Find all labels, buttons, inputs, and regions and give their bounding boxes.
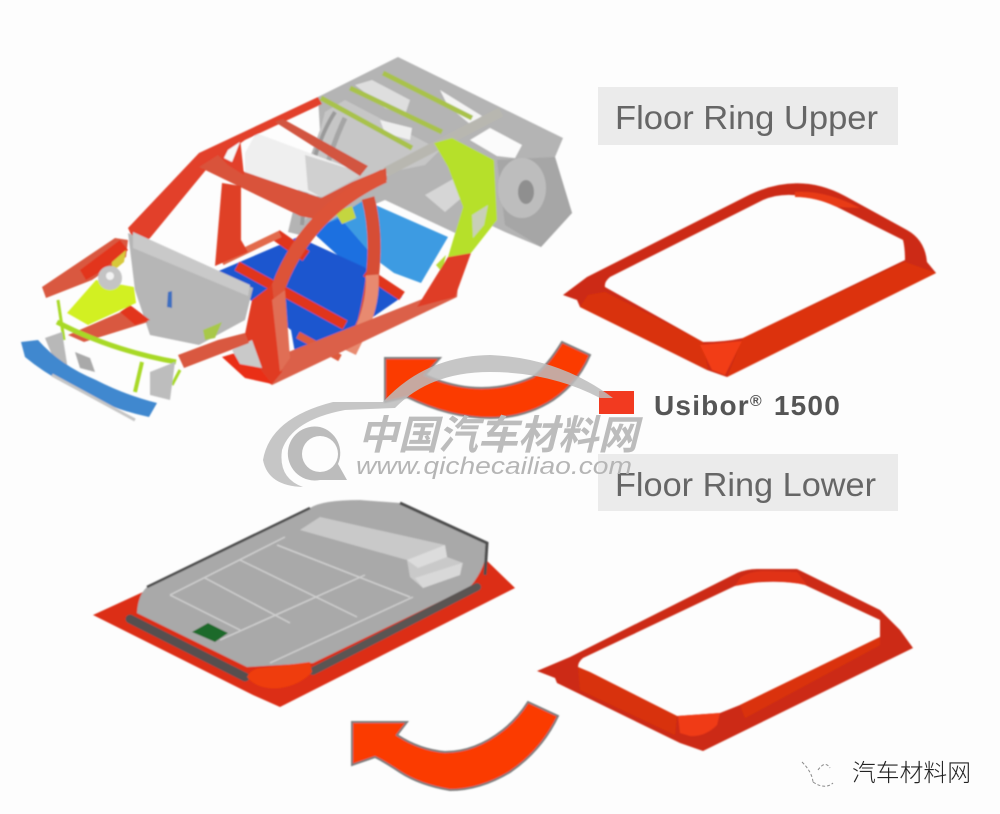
legend text: 1500 [774, 390, 841, 421]
yellow suspension tower [67, 280, 136, 325]
lower floor ring [537, 569, 913, 751]
label: Floor Ring Upper [598, 87, 898, 145]
upper floor ring [563, 183, 936, 377]
label: Floor Ring Upper: Floor Ring Upper [615, 99, 878, 136]
battery dark top edges [147, 508, 310, 587]
green roof bows [321, 73, 472, 148]
front right rail [178, 333, 249, 368]
dark side bars [130, 619, 245, 677]
watermark car swoosh [263, 355, 613, 487]
grey roof rear beam [386, 112, 501, 172]
battery raised module [300, 517, 463, 588]
battery rib lines [170, 537, 413, 663]
sunroof opening [245, 133, 363, 197]
wechat account mark [802, 753, 971, 788]
legend text: ® [750, 393, 763, 410]
label: Floor Ring Lower: Floor Ring Lower [615, 466, 876, 503]
watermark: site logo [263, 355, 643, 487]
upper red arrow [385, 342, 590, 418]
red roof and pillars [128, 97, 387, 352]
yellow-green rear pillar [434, 138, 497, 257]
red base plate [93, 557, 515, 707]
ring front faces [580, 292, 708, 370]
battery pack on lower ring [93, 500, 515, 707]
lower ring walls [578, 667, 677, 735]
radiator support [45, 332, 68, 370]
front left rail [42, 238, 150, 342]
red floor rails [222, 234, 402, 358]
label: Floor Ring Lower [598, 454, 898, 511]
car body-in-white illustration [21, 57, 572, 420]
blue front bumper [21, 340, 157, 417]
door ring arcs [258, 176, 384, 352]
red corner bracket [247, 662, 312, 688]
firewall grey panel [128, 233, 253, 345]
green module patch [192, 623, 228, 642]
legend text: Usibor [654, 390, 750, 421]
legend: Usibor 1500 [599, 390, 841, 421]
wechat icon [802, 762, 833, 786]
green cross member [57, 300, 180, 392]
watermark url: www.qichecailiao.com [356, 453, 632, 480]
blue floor panels [214, 200, 448, 372]
sill and rear lower structure [222, 253, 471, 385]
rear grey structure [288, 57, 572, 247]
account name: 汽车材料网 [852, 753, 971, 788]
lower red arrow [352, 702, 558, 790]
legend swatch [599, 391, 634, 414]
watermark Q ring [288, 427, 347, 480]
watermark chinese name: 中国汽车材料网 [358, 403, 643, 461]
battery top cover [137, 500, 487, 667]
